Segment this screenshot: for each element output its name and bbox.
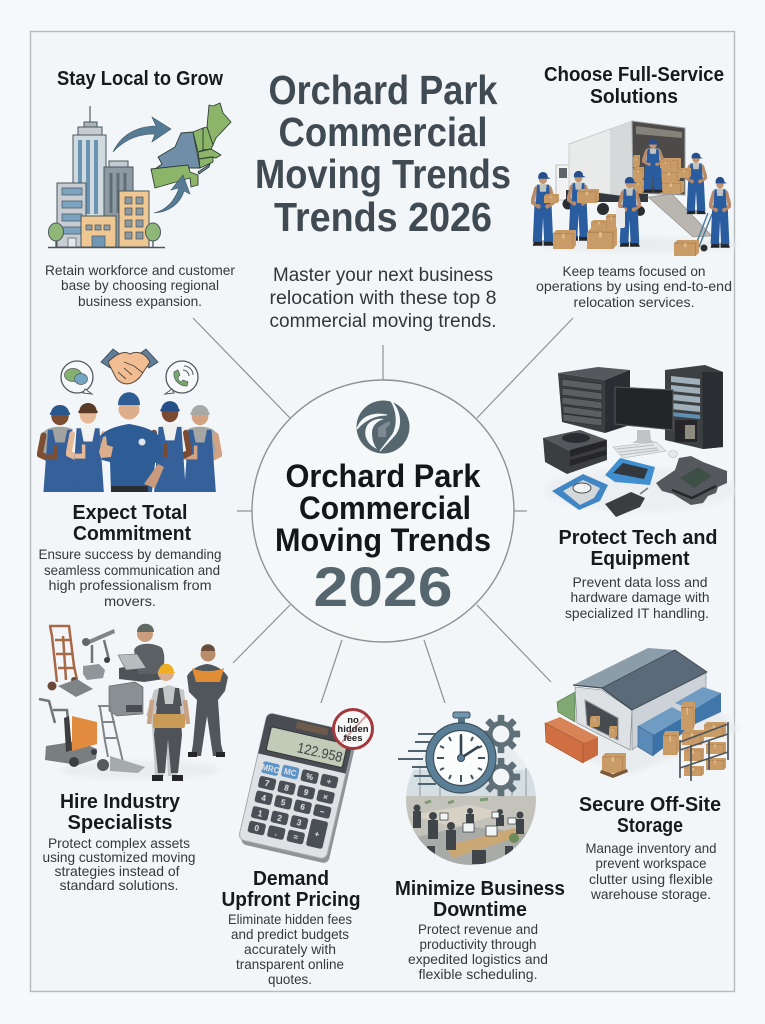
icon: calculator with no hidden fees badge: MC — [283, 767, 297, 778]
heading — [579, 794, 721, 837]
badge: no hidden fees: no — [347, 715, 359, 726]
central hub circle — [252, 380, 514, 642]
badge: no hidden fees: hidden — [337, 724, 369, 735]
icon: calculator with no hidden fees badge: ÷ — [326, 777, 333, 787]
icon: calculator with no hidden fees badge: 5 — [280, 798, 287, 808]
description — [565, 574, 710, 621]
hub title: Commercial — [299, 490, 471, 526]
description: movers. — [104, 593, 156, 609]
icon: calculator with no hidden fees badge — [237, 710, 372, 864]
description: base by choosing regional — [61, 277, 219, 293]
description: Prevent data loss and — [572, 574, 708, 590]
panel: expect total commitment — [38, 349, 222, 609]
description: Protect complex assets — [48, 835, 190, 851]
description: Manage inventory and — [586, 840, 716, 856]
icon: calculator with no hidden fees badge: × — [322, 792, 329, 802]
subtitle: relocation with these top 8 — [270, 288, 496, 309]
heading — [395, 878, 565, 921]
heading: Expect Total — [72, 502, 188, 524]
description: using customized moving — [42, 849, 196, 865]
icon: calculator with no hidden fees badge: 122.958 — [296, 739, 344, 766]
description — [45, 262, 235, 309]
description: relocation services. — [574, 294, 694, 310]
heading — [60, 791, 181, 834]
heading: Specialists — [68, 812, 172, 834]
icon: calculator with no hidden fees badge: 9 — [303, 788, 310, 798]
description: expedited logistics and — [408, 951, 548, 967]
description: strategies instead of — [54, 863, 180, 879]
icon: city skyline and northeast map — [48, 103, 231, 248]
description: Keep teams focused on — [562, 263, 706, 279]
heading — [544, 64, 724, 108]
title: Moving Trends — [255, 151, 511, 197]
description: hardware damage with — [570, 589, 710, 605]
panel: demand upfront pricing — [222, 710, 372, 987]
description: standard solutions. — [60, 877, 178, 893]
description — [586, 840, 716, 902]
description: Eliminate hidden fees — [228, 911, 352, 927]
icon: swirl logo — [356, 400, 410, 454]
icon: calculator with no hidden fees badge: 0 — [253, 824, 260, 834]
description: and predict budgets — [231, 926, 349, 942]
panel: choose full-service solutions — [532, 64, 740, 310]
illustration: stopwatch, gears and busy office — [398, 712, 540, 870]
icon: calculator with no hidden fees badge: 4 — [260, 793, 267, 803]
description: operations by using end-to-end — [536, 278, 732, 294]
description: Protect revenue and — [418, 921, 538, 937]
icon: calculator with no hidden fees badge: MRC — [261, 763, 280, 776]
title: Orchard Park — [268, 67, 498, 113]
description: accurately with — [244, 941, 336, 957]
description: seamless communication and — [44, 562, 220, 578]
heading — [72, 502, 191, 545]
description — [408, 921, 548, 982]
description: transparent online — [236, 956, 344, 972]
subtitle — [270, 265, 496, 332]
panel: protect tech and equipment — [543, 365, 735, 621]
description: flexible scheduling. — [418, 966, 538, 982]
heading: Minimize Business — [395, 878, 565, 900]
heading: Commitment — [73, 523, 191, 545]
hub title: Orchard Park — [286, 458, 481, 494]
hub title: Moving Trends — [275, 522, 491, 558]
illustration: moving truck with crew — [532, 121, 740, 256]
icon: calculator with no hidden fees badge: + — [314, 829, 321, 839]
illustration: servers, monitor and rugged drives — [543, 365, 735, 517]
heading: Choose Full-Service — [544, 64, 724, 86]
title: Commercial — [278, 109, 488, 155]
description: warehouse storage. — [590, 886, 711, 902]
hub year: 2026 — [314, 555, 452, 618]
heading: Hire Industry — [60, 791, 181, 813]
icon: calculator with no hidden fees badge: = — [292, 833, 299, 843]
heading: Storage — [617, 815, 683, 837]
icon: calculator with no hidden fees badge: 8 — [283, 783, 290, 793]
icon: calculator with no hidden fees badge: 7 — [264, 779, 271, 789]
description: Ensure success by demanding — [38, 546, 222, 562]
description: business expansion. — [78, 293, 202, 309]
subtitle: Master your next business — [273, 265, 493, 286]
badge: no hidden fees: fees — [343, 733, 363, 744]
illustration: handshake, chat icons and smiling crew — [40, 349, 219, 492]
description: high professionalism from — [48, 577, 212, 593]
heading: Solutions — [590, 86, 678, 108]
heading: Upfront Pricing — [222, 889, 360, 911]
icon: calculator with no hidden fees badge: 3 — [296, 818, 303, 828]
hub title — [275, 458, 491, 558]
title — [255, 67, 511, 240]
connector lines to eight trends — [193, 318, 573, 703]
icon: calculator with no hidden fees badge: 6 — [299, 802, 306, 812]
heading: Equipment — [590, 548, 690, 570]
heading: Demand — [253, 868, 329, 890]
heading: Stay Local to Grow — [57, 68, 223, 90]
heading — [558, 527, 718, 570]
heading — [222, 868, 360, 911]
panel: hire industry specialists — [39, 624, 228, 893]
description — [42, 835, 196, 893]
description: quotes. — [268, 971, 312, 987]
subtitle: commercial moving trends. — [270, 311, 496, 332]
illustration: hand trucks, machinery and specialists — [39, 624, 228, 781]
heading: Secure Off-Site — [579, 794, 721, 816]
title: Trends 2026 — [274, 194, 492, 240]
icon: calculator with no hidden fees badge: 2 — [276, 814, 283, 823]
description: Retain workforce and customer — [45, 262, 235, 278]
icon: calculator with no hidden fees badge: − — [319, 807, 326, 817]
icon: calculator with no hidden fees badge: 1 — [257, 809, 264, 819]
description — [228, 911, 352, 987]
description: specialized IT handling. — [565, 605, 709, 621]
panel: minimize business downtime — [395, 712, 565, 982]
heading: Downtime — [433, 899, 527, 921]
description — [536, 263, 732, 310]
description: clutter using flexible — [589, 871, 713, 887]
icon: calculator with no hidden fees badge: . — [274, 828, 278, 838]
description: prevent workspace — [596, 855, 707, 871]
panel: stay local to grow — [45, 68, 235, 309]
illustration: warehouse, containers and racks — [545, 648, 740, 781]
icon: calculator with no hidden fees badge: % — [305, 772, 314, 782]
panel: secure off-site storage — [545, 648, 740, 902]
description: productivity through — [420, 936, 536, 952]
heading: Protect Tech and — [558, 527, 718, 549]
badge: no hidden fees — [334, 710, 372, 748]
description — [38, 546, 222, 609]
